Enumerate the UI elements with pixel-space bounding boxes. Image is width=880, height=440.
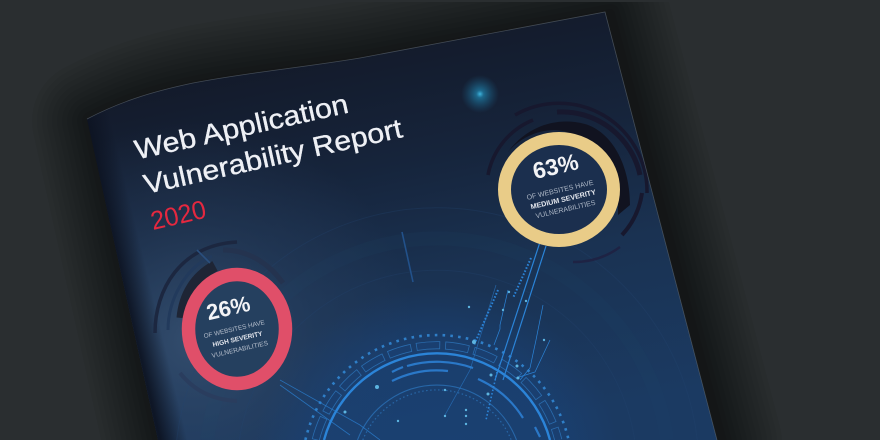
- donut: 26% high severity: OF WEBSITES HAVE: [203, 319, 265, 340]
- title: [132, 88, 405, 200]
- donut: 63% medium severity: [504, 138, 614, 240]
- donut: 63% medium severity: 63%: [530, 148, 581, 184]
- brochure cover: [87, 12, 717, 440]
- faint background rings: [176, 208, 591, 440]
- tech circle graphic: [290, 308, 581, 440]
- donut: 26% high severity: VULNERABILITIES: [211, 340, 269, 360]
- title: Web Application: [132, 88, 351, 165]
- brochure edge highlight: [87, 12, 717, 440]
- brochure shadow: [92, 14, 722, 440]
- ring arcs around high severity donut: [155, 242, 283, 401]
- donut: 63% medium severity: OF WEBSITES HAVE: [526, 180, 595, 202]
- year: 2020: [148, 194, 209, 236]
- donut: 63% medium severity: MEDIUM SEVERITY: [530, 187, 597, 211]
- glowing spot: [463, 77, 497, 111]
- donut: 63% medium severity: VULNERABILITIES: [535, 200, 597, 220]
- circuit nodes: [344, 291, 545, 425]
- circuit traces: [280, 232, 550, 440]
- ring arcs around medium severity donut: [488, 103, 647, 262]
- title: Vulnerability Report: [141, 112, 405, 200]
- donut: 26% high severity: 26%: [204, 291, 253, 325]
- donut: 26% high severity: HIGH SEVERITY: [212, 330, 264, 349]
- donut: 26% high severity: [188, 274, 286, 384]
